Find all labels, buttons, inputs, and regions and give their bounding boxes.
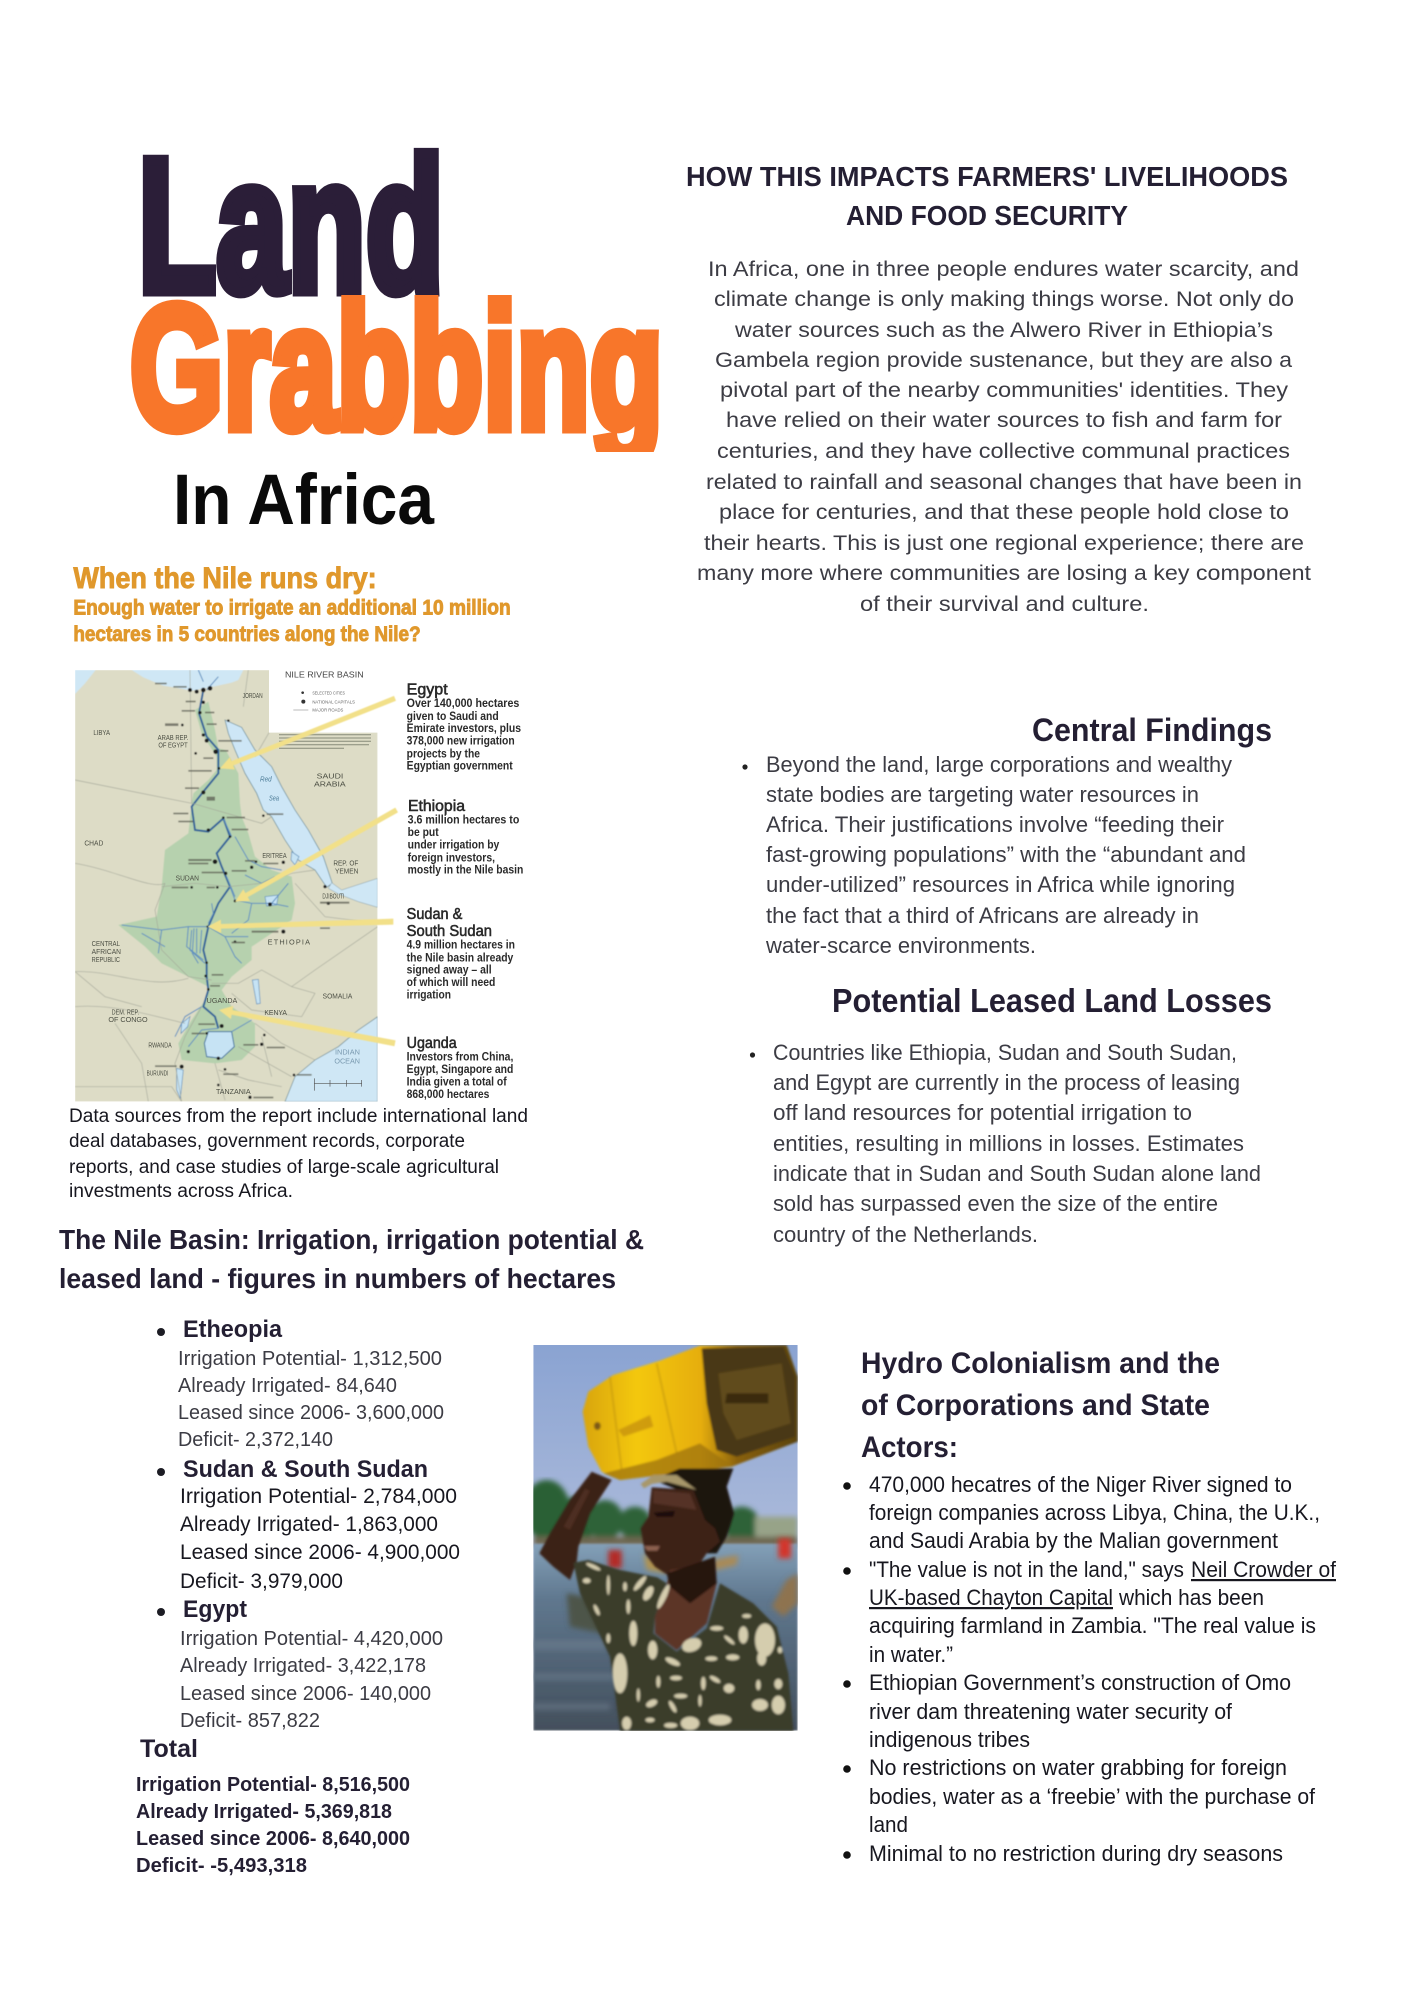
title word: Land: Land	[138, 120, 444, 332]
callout: Sudan and South Sudan: irrigation	[407, 989, 451, 1002]
heading: when the Nile runs dry	[73, 562, 511, 646]
map labels: BURUNDI	[147, 1068, 168, 1077]
callout: Ethiopia: Ethiopia	[408, 799, 466, 815]
bullet text: leasing countries	[750, 1040, 1261, 1247]
text block: water scarcity paragraph: related to rainfall and seasonal changes that have been in	[706, 470, 1302, 494]
list item: Sudan and South Sudan	[157, 1456, 460, 1593]
callout: Ethiopia: mostly in the Nile basin	[408, 864, 523, 877]
callout: Egypt: projects by the	[407, 748, 480, 760]
heading: the Nile Basin figures	[59, 1224, 644, 1294]
callout: Uganda	[407, 1036, 513, 1101]
map legend: MAJOR ROADS	[312, 708, 343, 713]
panel: Nile infographic	[59, 562, 1337, 1877]
heading: how this impacts farmers: HOW THIS IMPACTS FARMERS' LIVELIHOODS	[686, 161, 1288, 192]
sea: Mediterranean	[75, 670, 243, 694]
map labels: REP. OF	[333, 858, 359, 867]
list item: Sudan and South Sudan: Deficit- 3,979,000	[180, 1570, 343, 1593]
head wrap	[641, 1475, 697, 1490]
bullet text: water resources targeted: Beyond the land, large corporations and wealthy	[766, 752, 1233, 777]
map labels: OF EGYPT	[158, 741, 188, 750]
arrow: Ethiopia	[235, 808, 398, 902]
map labels: RWANDA	[148, 1041, 172, 1050]
callout: Egypt: Egyptian government	[407, 760, 513, 773]
map legend: SELECTED CITIES	[312, 690, 345, 695]
map labels: LIBYA	[93, 728, 110, 737]
neck and chest	[655, 1563, 717, 1650]
heading: central findings: Central Findings	[1032, 712, 1272, 748]
list item: Etheopia: Deficit- 2,372,140	[178, 1429, 333, 1451]
bullet list: hydro colonialism points	[843, 1472, 1337, 1866]
map labels: Sea	[269, 794, 279, 803]
text block: water scarcity paragraph: climate change is only making things worse. Not only do	[714, 287, 1294, 311]
callout: Ethiopia: 3.6 million hectares to	[408, 814, 519, 827]
basin: green Nile catchment	[118, 702, 295, 1063]
heading: hydro colonialism	[861, 1347, 1220, 1464]
text block: data sources: investments across Africa.	[69, 1181, 293, 1202]
text block: water scarcity paragraph: many more where communities are losing a key component	[697, 561, 1311, 585]
map labels: AFRICAN	[92, 947, 121, 956]
dress print	[583, 1561, 785, 1730]
map labels: REPUBLIC	[92, 955, 121, 964]
map labels: CENTRAL	[92, 939, 120, 948]
list item: Etheopia: Leased since 2006- 3,600,000	[178, 1402, 444, 1424]
text block: water scarcity paragraph: place for centuries, and that these people hold close to	[719, 500, 1289, 524]
callout: Sudan and South Sudan: of which will need	[407, 977, 495, 989]
bullet: dry seasons: Minimal to no restriction during dry seasons	[869, 1841, 1283, 1866]
bullet: value quote: acquiring farmland in Zambia. "The real value is	[869, 1613, 1316, 1638]
small city names, illegible in the source	[155, 683, 349, 1098]
heading: hydro colonialism: Hydro Colonialism and the	[861, 1347, 1220, 1380]
heading: the Nile Basin figures: The Nile Basin: Irrigation, irrigation potential &	[59, 1224, 644, 1255]
text block: water scarcity paragraph: water sources such as the Alwero River in Ethiopia’s	[734, 318, 1273, 342]
bullet text: leasing countries: indicate that in Sudan and South Sudan alone land	[773, 1161, 1261, 1186]
callout: Sudan and South Sudan: the Nile basin already	[407, 952, 514, 964]
map legend: NILE RIVER BASIN	[285, 670, 364, 680]
bullet: value quote: UK-based Chayton Capital	[869, 1585, 1113, 1610]
bullet text: water resources targeted: water-scarce environments.	[765, 933, 1036, 958]
bullet: Omo river dam: river dam threatening water security of	[869, 1699, 1233, 1724]
city dots	[180, 686, 330, 1099]
bullet: value quote	[843, 1557, 1337, 1667]
map legend	[285, 670, 364, 713]
callout: Sudan and South Sudan: Sudan &	[407, 907, 463, 923]
map labels: ARAB REP.	[158, 733, 188, 742]
bullet: no restrictions	[843, 1755, 1316, 1837]
bullet text: water resources targeted: state bodies are targeting water resources in	[766, 782, 1199, 807]
callout: Uganda: Egypt, Singapore and	[407, 1064, 513, 1076]
bullet text: leasing countries: sold has surpassed even the size of the entire	[773, 1191, 1218, 1216]
bullet text: leasing countries: and Egypt are currently in the process of leasing	[773, 1070, 1240, 1095]
map labels: ARABIA	[314, 780, 346, 789]
callout: Sudan and South Sudan: signed away – all	[407, 964, 492, 977]
callout: Ethiopia	[408, 799, 523, 877]
bullet: Niger River: and Saudi Arabia by the Malian government	[869, 1528, 1278, 1553]
bullet text: water resources targeted	[742, 752, 1246, 958]
map labels: KENYA	[264, 1008, 287, 1017]
callout: Egypt: Over 140,000 hectares	[407, 698, 519, 710]
callout: Sudan and South Sudan	[407, 907, 515, 1002]
text block: data sources: Data sources from the report include international land	[69, 1106, 528, 1127]
list item: Etheopia	[157, 1316, 444, 1451]
map labels: SAUDI	[317, 772, 343, 781]
list item: Egypt	[157, 1596, 443, 1732]
bullet: value quote: which has been	[1118, 1585, 1264, 1610]
list item: Etheopia: Etheopia	[183, 1316, 283, 1343]
heading: potential leased land losses: Potential Leased Land Losses	[832, 982, 1272, 1019]
list item: Sudan and South Sudan: Leased since 2006- 4,900,000	[180, 1541, 460, 1564]
text block: water scarcity paragraph	[697, 257, 1311, 616]
bullet: Niger River	[843, 1472, 1320, 1553]
hair	[653, 1468, 734, 1553]
callout: Sudan and South Sudan: South Sudan	[407, 924, 492, 940]
bullet text: leasing countries: country of the Netherlands.	[773, 1222, 1038, 1247]
heading: hydro colonialism: of Corporations and State	[861, 1389, 1210, 1422]
text block: data sources: reports, and case studies of large-scale agricultural	[69, 1157, 499, 1178]
callout: Egypt: 378,000 new irrigation	[407, 735, 515, 748]
bullet: value quote: "The value is not in the land," says	[869, 1557, 1184, 1582]
callouts beside the map	[407, 682, 523, 1101]
bullet text: leasing countries: entities, resulting in millions in losses. Estimates	[773, 1131, 1244, 1156]
heading: hydro colonialism: Actors:	[861, 1431, 958, 1464]
title word: Grabbing: Grabbing	[130, 270, 663, 466]
sea: Gulf of Aden	[328, 878, 378, 907]
map labels: JORDAN	[243, 691, 263, 700]
callout: Uganda: Uganda	[407, 1036, 457, 1052]
heading: how this impacts farmers	[686, 161, 1288, 231]
panel: country figures list	[136, 1316, 460, 1877]
title line: In Africa: In Africa	[173, 461, 434, 540]
list item: Egypt: Irrigation Potential- 4,420,000	[180, 1628, 443, 1650]
text block: water scarcity paragraph: of their survival and culture.	[860, 592, 1149, 616]
text block: water scarcity paragraph: have relied on their water sources to fish and farm for	[726, 408, 1282, 432]
map scale bar	[314, 1078, 362, 1091]
map labels: Red	[260, 774, 272, 783]
callout: Uganda: Investors from China,	[407, 1051, 513, 1064]
callout: Uganda: 868,000 hectares	[407, 1089, 489, 1101]
river: Nile	[192, 690, 230, 1028]
bullet: value quote: Neil Crowder of	[1191, 1557, 1337, 1582]
list item: Sudan and South Sudan: Already Irrigated- 1,863,000	[180, 1513, 438, 1536]
callout: Uganda: India given a total of	[407, 1076, 507, 1089]
total figures: Already Irrigated- 5,369,818	[136, 1801, 392, 1823]
face	[641, 1487, 720, 1577]
map labels: DJIBOUTI	[322, 891, 344, 900]
list item: Egypt: Leased since 2006- 140,000	[180, 1683, 431, 1705]
callout: Sudan and South Sudan: 4.9 million hectares in	[407, 939, 515, 952]
rivers: tributaries	[122, 670, 288, 1047]
map labels: TANZANIA	[216, 1087, 251, 1096]
photo: woman carrying yellow jerrycan on her head	[523, 1345, 798, 1731]
map: Nile river basin	[75, 670, 398, 1102]
total figures	[136, 1735, 410, 1877]
sea: Red Sea	[225, 720, 332, 887]
arm	[539, 1472, 612, 1580]
map legend: NATIONAL CAPITALS	[312, 699, 355, 704]
arrow: Sudan and South Sudan	[208, 919, 393, 933]
map labels: DEM. REP.	[112, 1007, 139, 1016]
bullet text: water resources targeted: Africa. Their justifications involve “feeding their	[766, 812, 1225, 837]
bullet text: water resources targeted: fast-growing populations” with the “abundant and	[766, 842, 1246, 867]
panel: central findings	[742, 712, 1272, 958]
total figures: Irrigation Potential- 8,516,500	[136, 1774, 410, 1796]
panel: potential leased land losses	[750, 982, 1272, 1247]
title: Land Grabbing In Africa	[131, 148, 659, 524]
list item: Sudan and South Sudan: Irrigation Potential- 2,784,000	[180, 1485, 457, 1508]
callout: Egypt: given to Saudi and	[407, 710, 499, 723]
bullet: Omo river dam	[843, 1670, 1291, 1752]
bullet text: water resources targeted: under-utilized” resources in Africa while ignoring	[766, 872, 1235, 897]
map labels: OF CONGO	[108, 1015, 148, 1024]
map labels: ERITREA	[262, 851, 287, 860]
bullet: no restrictions: bodies, water as a ‘freebie’ with the purchase of	[869, 1784, 1316, 1809]
heading: when the Nile runs dry: Enough water to irrigate an additional 10 million	[73, 596, 511, 620]
bullet text: leasing countries: Countries like Ethiopia, Sudan and South Sudan,	[773, 1040, 1237, 1065]
borders	[75, 670, 378, 1102]
list item: Etheopia: Irrigation Potential- 1,312,500	[178, 1348, 442, 1370]
total figures: Leased since 2006- 8,640,000	[136, 1828, 410, 1850]
callout: Egypt: Emirate investors, plus	[407, 723, 521, 735]
map labels: ETHIOPIA	[268, 937, 310, 946]
total figures: Total	[140, 1735, 198, 1763]
panel: hydro colonialism	[843, 1347, 1337, 1866]
bullet: Omo river dam: Ethiopian Government’s construction of Omo	[869, 1670, 1291, 1695]
map note	[279, 734, 371, 749]
jerrycan	[583, 1345, 798, 1480]
callout: Ethiopia: be put	[408, 827, 439, 839]
list item: Etheopia: Already Irrigated- 84,640	[178, 1375, 397, 1397]
heading: the Nile Basin figures: leased land - figures in numbers of hectares	[59, 1263, 616, 1294]
text block: water scarcity paragraph: their hearts. This is just one regional experience; there are	[704, 531, 1304, 555]
map labels	[84, 691, 360, 1096]
text block: water scarcity paragraph: centuries, and they have collective communal practices	[717, 439, 1290, 463]
lakes: Turkana, Tana, others	[177, 852, 299, 1098]
heading: how this impacts farmers: AND FOOD SECURITY	[846, 200, 1128, 231]
bullet: value quote: in water.”	[869, 1642, 953, 1667]
list item: Egypt: Egypt	[183, 1596, 247, 1623]
text block: water scarcity paragraph: pivotal part of the nearby communities' identities. They	[720, 378, 1288, 402]
total figures: Deficit- -5,493,318	[136, 1855, 307, 1877]
map labels: YEMEN	[335, 866, 358, 875]
heading: when the Nile runs dry: hectares in 5 countries along the Nile?	[73, 622, 421, 646]
arrow: Uganda	[219, 1006, 396, 1046]
bullet: Niger River: 470,000 hecatres of the Niger River signed to	[869, 1472, 1292, 1497]
text block: water scarcity paragraph: Gambela region provide sustenance, but they are also a	[715, 348, 1292, 372]
map labels: CHAD	[84, 839, 103, 848]
panel: impact on farmers	[686, 161, 1311, 616]
bullet: no restrictions: land	[869, 1812, 908, 1837]
map labels: OCEAN	[334, 1057, 360, 1066]
arrow: Egypt	[220, 696, 396, 770]
callout: Ethiopia: under irrigation by	[408, 839, 500, 852]
dress	[573, 1560, 793, 1731]
text block: data sources: deal databases, government records, corporate	[69, 1131, 465, 1152]
sea: Indian Ocean	[285, 1017, 378, 1102]
bullet text: water resources targeted: the fact that a third of Africans are already in	[766, 903, 1199, 928]
lake: Victoria	[204, 1032, 234, 1058]
bullet: Omo river dam: indigenous tribes	[869, 1727, 1030, 1752]
text block: water scarcity paragraph: In Africa, one in three people endures water scarcity, and	[708, 257, 1299, 281]
map labels: INDIAN	[335, 1048, 360, 1057]
bullet: no restrictions: No restrictions on water grabbing for foreign	[869, 1755, 1287, 1780]
map labels: SUDAN	[176, 873, 199, 882]
map labels: SOMALIA	[323, 991, 352, 1000]
list item: Sudan and South Sudan: Sudan & South Sudan	[183, 1456, 428, 1483]
callout: Ethiopia: foreign investors,	[408, 852, 495, 864]
callout: Egypt: Egypt	[407, 682, 448, 699]
list item: Egypt: Deficit- 857,822	[180, 1710, 320, 1732]
text block: data sources	[69, 1106, 528, 1202]
bullet text: leasing countries: off land resources for potential irrigation to	[773, 1100, 1192, 1125]
heading: when the Nile runs dry: When the Nile runs dry:	[73, 562, 377, 595]
map labels: UGANDA	[207, 996, 237, 1005]
callout: Egypt	[407, 682, 521, 773]
list item: Egypt: Already Irrigated- 3,422,178	[180, 1655, 426, 1677]
bullet: Niger River: foreign companies across Libya, China, the U.K.,	[869, 1500, 1320, 1525]
